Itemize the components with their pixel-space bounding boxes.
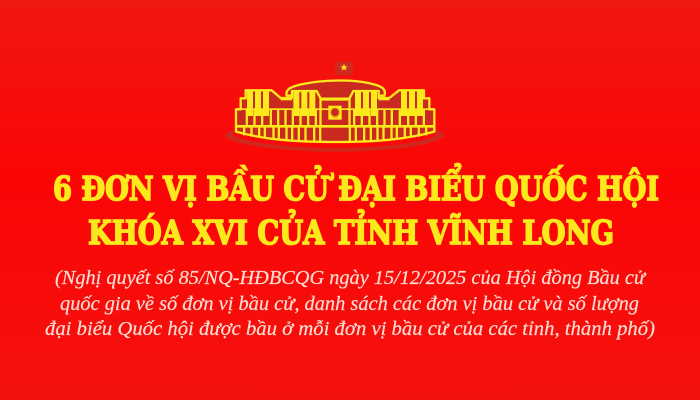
ground floor pillars [243,127,427,142]
ground ellipse [225,129,444,152]
facade lower pillars [236,99,434,128]
subtitle line 3: đại biểu Quốc hội được bầu ở mỗi đơn vị bầu cử của các tỉnh, thành phố) [45,318,655,340]
building body [236,90,434,142]
icon: National Assembly building with flag [225,62,444,152]
icon: flag with star [335,62,353,75]
title [53,162,659,252]
roof dome [286,80,385,100]
subtitle line 1: (Nghị quyết số 85/NQ-HĐBCQG ngày 15/12/2025 của Hội đồng Bầu cử [55,267,647,289]
tower columns [247,91,423,116]
icon: national emblem [328,106,342,120]
subtitle line 2: quốc gia về số đơn vị bầu cử, danh sách các đơn vị bầu cử và số lượng [60,293,639,315]
subtitle: resolution reference [45,267,655,340]
